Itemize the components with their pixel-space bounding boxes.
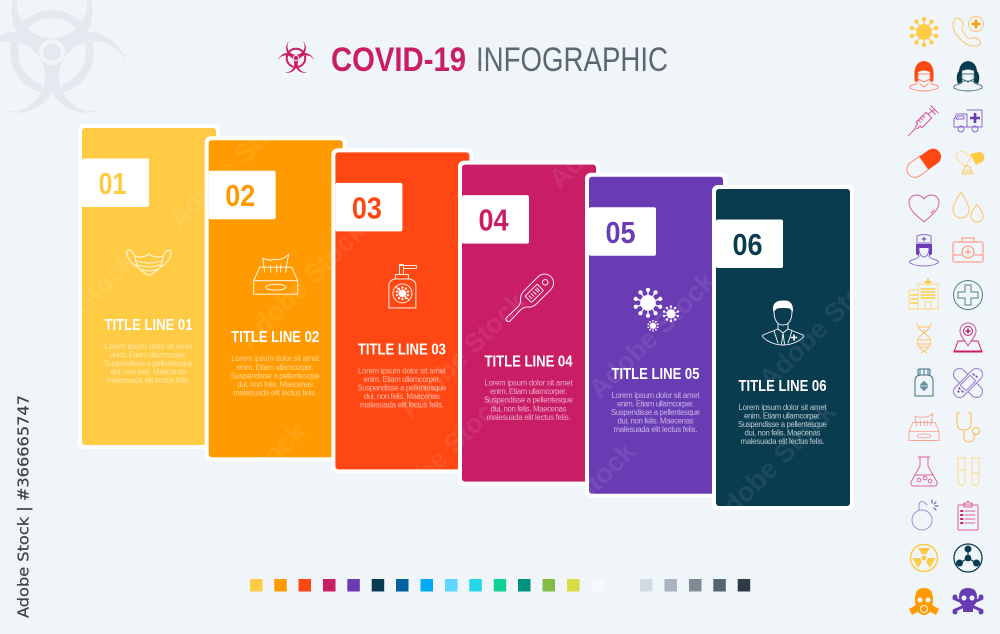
icon: map pin [954, 323, 982, 352]
diagonal watermarks: Adobe Stock [3, 0, 142, 134]
body text 01: dui, non felis. Maecenas [110, 368, 187, 377]
body text 02: malesuada elit lectus felis. [233, 388, 317, 397]
icon: phone call [953, 16, 984, 46]
body text 01 [104, 342, 193, 385]
icon: chemical molecule [954, 544, 982, 572]
icon: woman with mask [910, 61, 938, 91]
body text 05 [611, 391, 700, 434]
body text 04: dui, non felis. Maecenas [490, 404, 567, 413]
icon: flask [911, 457, 937, 486]
icon: hospital [909, 279, 938, 309]
title [276, 41, 668, 79]
icon: gas mask [909, 588, 939, 615]
body text 03 [357, 366, 447, 410]
icon: bomb [912, 500, 938, 530]
icon: radiation [910, 544, 938, 572]
body text 06: enim. Etiam ullamcorper. [744, 412, 821, 421]
body text 05: Suspendisse a pellentesque [611, 408, 700, 417]
diagonal watermarks: Adobe Stock [503, 436, 642, 574]
title line 04: TITLE LINE 04 [484, 354, 573, 371]
icon: test tubes [957, 458, 980, 486]
body text 04: Suspendisse a pellentesque [484, 396, 573, 405]
number tab 04: 04 [478, 203, 509, 238]
body text 03: Suspendisse a pellentesque [357, 384, 446, 392]
icon: doctor [763, 301, 803, 345]
diagonal watermarks: Adobe Stock [703, 396, 842, 534]
icon: thermometer [500, 270, 557, 327]
icon: first-aid kit [953, 238, 983, 262]
panel: card 03 [331, 148, 473, 473]
body text 06 [738, 403, 827, 446]
body text 06: malesuada elit lectus felis. [740, 437, 824, 446]
diagonal watermarks: Adobe Stock [3, 246, 142, 384]
icon: virus [910, 17, 938, 47]
icon: nurse [910, 234, 938, 266]
icon: stethoscope [957, 413, 980, 442]
number tab 01: 01 [98, 166, 126, 201]
number tab 03: 03 [352, 190, 382, 225]
body text 05: Lorem ipsum dolor sit amet [612, 391, 700, 400]
panel: card 02 [205, 136, 347, 461]
number tab 05: 05 [606, 215, 636, 250]
body text 03: enim. Etiam ullamcorper. [363, 375, 440, 384]
icon: open capsule with powder [956, 151, 984, 174]
icon: medical cross in circle [954, 280, 982, 310]
body text 02: Lorem ipsum dolor sit amet [231, 354, 320, 363]
body text 01: enim. Etiam ullamcorper. [110, 351, 187, 360]
icon: woman with mask, dark hair [954, 61, 982, 91]
number tab 02 [209, 171, 276, 219]
icon: faint biohazard background [0, 0, 133, 122]
title: COVID-19: COVID-19 [331, 41, 466, 79]
colour palette swatches [250, 579, 750, 592]
panel: card 05 [585, 173, 727, 498]
body text 06: Lorem ipsum dolor sit amet [738, 403, 827, 412]
icon: medicine bottle [915, 369, 933, 396]
title: INFOGRAPHIC: INFOGRAPHIC [476, 41, 668, 79]
icon: syringe [905, 106, 938, 139]
icon: bandages [951, 366, 985, 400]
diagonal watermarks: Adobe Stock [393, 286, 532, 424]
body text 02 [231, 354, 320, 397]
icon: sanitizer bottle [389, 264, 416, 308]
body text 03: dui, non felis. Maecenas [364, 392, 440, 401]
icon: skull and crossbones [952, 588, 984, 614]
number tab 05 [589, 207, 656, 256]
icon: virus particles [634, 288, 679, 332]
number tab 02: 02 [225, 178, 255, 213]
body text 03: Lorem ipsum dolor sit amet [358, 366, 447, 375]
stock id label: Adobe Stock | #366665747 [14, 395, 32, 618]
body text 01: malesuada elit lectus felis. [106, 376, 190, 385]
icon: capsule [904, 146, 944, 180]
title line 03: TITLE LINE 03 [358, 341, 446, 358]
body text 04: enim. Etiam ullamcorper. [490, 387, 567, 396]
number tab 06: 06 [732, 227, 762, 262]
title line 01: TITLE LINE 01 [104, 317, 193, 334]
body text 06: Suspendisse a pellentesque [738, 420, 827, 429]
body text 04: malesuada elit lectus felis. [486, 413, 570, 422]
diagonal watermarks: Adobe Stock [723, 26, 862, 164]
body text 05: enim. Etiam ullamcorper. [617, 399, 694, 408]
panel: card 01 [78, 124, 220, 449]
diagonal watermarks: Adobe Stock [753, 256, 892, 394]
icon: heart [909, 195, 939, 222]
body text 06: dui, non felis. Maecenas [744, 429, 821, 438]
body text 02: enim. Etiam ullamcorper. [237, 363, 314, 372]
body text 04: Lorem ipsum dolor sit amet [484, 379, 573, 388]
diagonal watermarks: Adobe Stock [543, 56, 682, 194]
body text 01: Lorem ipsum dolor sit amet [104, 342, 193, 351]
body text 03: malesuada elit lectus felis. [360, 401, 444, 410]
body text 05: dui, non felis. Maecenas [618, 416, 694, 426]
title line 06: TITLE LINE 06 [738, 378, 827, 395]
body text 05: malesuada elit lectus felis. [614, 425, 698, 434]
diagonal watermarks: Adobe Stock [373, 386, 512, 524]
diagonal watermarks: Adobe Stock [383, 16, 522, 154]
body text 02: Suspendisse a pellentesque [231, 371, 320, 380]
icon column: medical icon set [904, 16, 985, 615]
diagonal watermarks: Adobe Stock [233, 216, 372, 354]
icon: face mask [127, 250, 171, 275]
diagonal watermarks: Adobe Stock [163, 96, 302, 234]
icon: tissue box [254, 254, 298, 294]
diagonal watermarks: Adobe Stock [583, 266, 722, 404]
number tab 06 [716, 220, 783, 268]
icon: ambulance [954, 110, 982, 132]
panel: card 06 [712, 185, 854, 510]
icon: clipboard [958, 501, 978, 530]
number tab 03 [335, 183, 402, 231]
diagonal watermarks: Adobe Stock [173, 416, 312, 554]
body text 02: dui, non felis. Maecenas [237, 380, 313, 389]
title line 02: TITLE LINE 02 [231, 329, 319, 346]
icon: DNA helix [917, 323, 931, 353]
title line 05: TITLE LINE 05 [612, 366, 700, 383]
panel: card 04 [458, 161, 600, 486]
body text 01: Suspendisse a pellentesque [104, 359, 193, 368]
number tab 04 [462, 195, 529, 244]
icon: biohazard [276, 41, 316, 75]
icon: drops [953, 192, 983, 222]
body text 04 [484, 379, 573, 422]
number tab 01 [82, 158, 149, 207]
diagonal watermarks: Adobe Stock [833, 426, 972, 564]
icon: tissue box [909, 413, 939, 441]
